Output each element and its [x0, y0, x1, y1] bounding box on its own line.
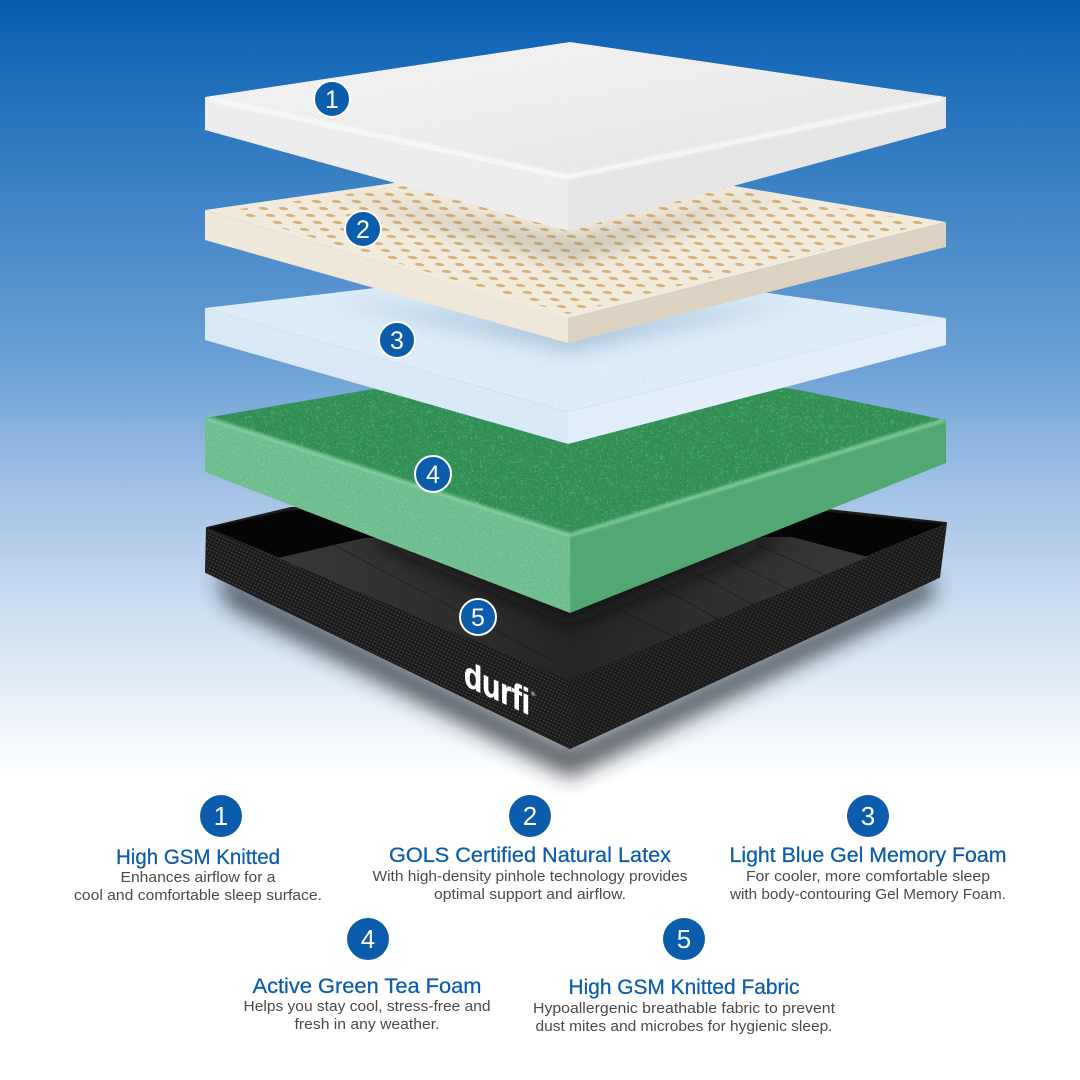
feature 1: High GSM Knitted: [74, 795, 322, 904]
feature 3: Light Blue Gel Memory Foam: For cooler, more comfortable sleep: [746, 869, 990, 885]
badge 1 on layer: 1: [325, 86, 339, 114]
layer 3: light blue gel memory foam: [205, 265, 946, 444]
mattress exploded layer stack: [205, 42, 946, 778]
feature 3: Light Blue Gel Memory Foam: with body-contouring Gel Memory Foam.: [729, 887, 1006, 903]
feature 5: High GSM Knitted Fabric: High GSM Knitted Fabric: [568, 976, 800, 999]
feature 4: Active Green Tea Foam: Active Green Tea Foam: [252, 975, 482, 998]
badge 1 on layer: [314, 81, 350, 117]
feature 2: GOLS Certified Natural Latex: GOLS Certified Natural Latex: [389, 844, 672, 867]
feature 5: High GSM Knitted Fabric: [533, 918, 835, 1035]
feature 1: High GSM Knitted: Enhances airflow for a: [120, 870, 277, 886]
feature 5: High GSM Knitted Fabric: dust mites and microbes for hygienic sleep.: [536, 1019, 832, 1035]
feature 3: Light Blue Gel Memory Foam: 3: [861, 801, 875, 831]
drop shadow under base: [215, 570, 934, 778]
feature 1: High GSM Knitted: cool and comfortable sleep surface.: [74, 888, 322, 904]
feature 2: GOLS Certified Natural Latex: With high-density pinhole technology provides: [372, 869, 688, 885]
feature 3: Light Blue Gel Memory Foam: [729, 795, 1006, 903]
feature 4: Active Green Tea Foam: [244, 918, 490, 1033]
layer 5: black knitted fabric base: [206, 506, 946, 748]
feature 4: Active Green Tea Foam: 4: [361, 924, 375, 954]
feature 3: Light Blue Gel Memory Foam: Light Blue Gel Memory Foam: [730, 844, 1006, 867]
durfi logo: durfi: [464, 654, 530, 724]
layer 2: GOLS certified natural latex: [205, 158, 946, 343]
feature 1: High GSM Knitted: 1: [214, 801, 228, 831]
feature 2: GOLS Certified Natural Latex: [372, 795, 688, 903]
badge 5 on layer: [460, 599, 496, 635]
feature 4: Active Green Tea Foam: fresh in any weather.: [294, 1017, 440, 1033]
badge 2 on layer: [345, 211, 381, 247]
layer 4: active green tea foam: [205, 355, 946, 613]
badge 4 on layer: 4: [426, 461, 440, 489]
badge 5 on layer: 5: [471, 604, 485, 632]
feature 5: High GSM Knitted Fabric: 5: [677, 924, 691, 954]
layer 1: high GSM knitted cover: [205, 42, 946, 231]
feature 2: GOLS Certified Natural Latex: optimal support and airflow.: [434, 887, 626, 903]
feature 4: Active Green Tea Foam: Helps you stay cool, stress-free and: [244, 999, 490, 1015]
durfi logo: ®: [531, 689, 536, 699]
feature 5: High GSM Knitted Fabric: Hypoallergenic breathable fabric to prevent: [533, 1001, 835, 1017]
feature 1: High GSM Knitted: High GSM Knitted: [116, 846, 280, 869]
badge 4 on layer: [415, 456, 451, 492]
badge 3 on layer: 3: [390, 327, 404, 355]
badge 2 on layer: 2: [356, 216, 370, 244]
badge 3 on layer: [379, 322, 415, 358]
feature 2: GOLS Certified Natural Latex: 2: [523, 801, 537, 831]
